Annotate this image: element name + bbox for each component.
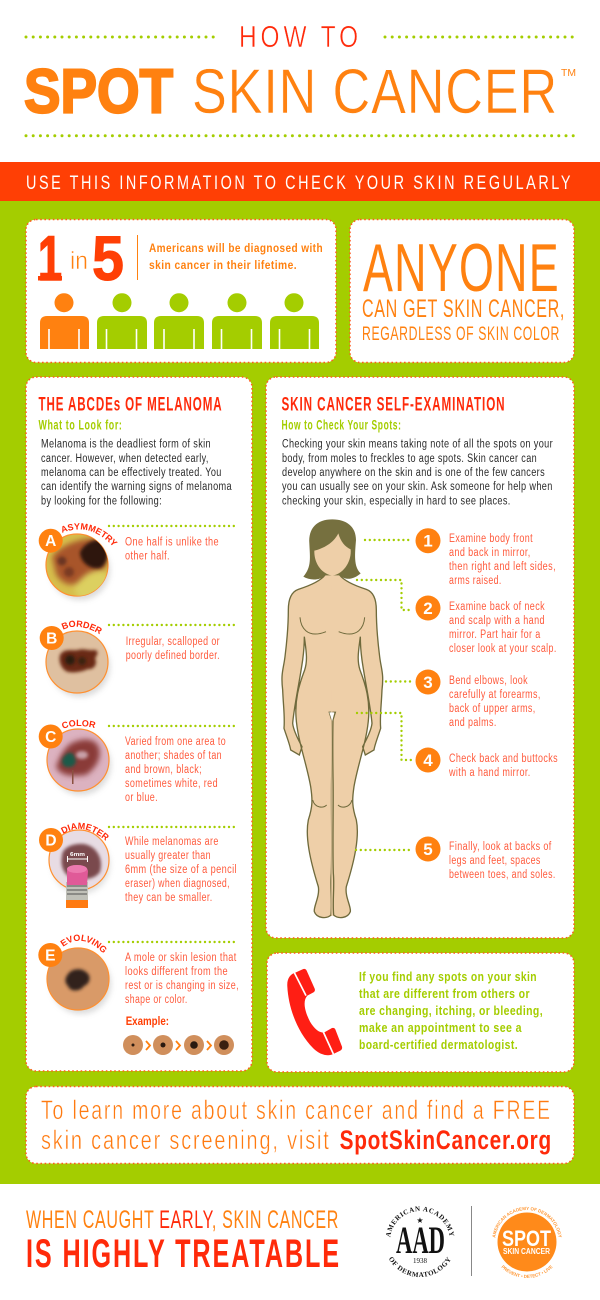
subheading: What to Look for:	[38, 416, 122, 432]
item C color: Varied from one area to	[125, 736, 226, 748]
step 3: carefully at forearms,	[449, 689, 541, 701]
item B border: Irregular, scalloped or	[126, 636, 220, 648]
item E evolving: A mole or skin lesion that	[125, 952, 237, 964]
item E evolving: rest or is changing in size,	[125, 980, 239, 992]
call to action text: that are different from others or	[359, 986, 530, 1001]
logo: AAD seal: AMERICAN ACADEMY	[386, 1206, 454, 1238]
title: HOW TO	[239, 19, 362, 54]
logo: SPOT seal: SPOT	[502, 1226, 551, 1251]
step 4: 4	[423, 751, 433, 770]
step 2	[416, 596, 557, 655]
logo: SPOT seal: AMERICAN ACADEMY OF DERMATOLOGY	[492, 1206, 562, 1238]
item B border	[40, 620, 235, 699]
panel: learn more banner: skin cancer screening, visit	[41, 1125, 331, 1155]
statistic description	[149, 241, 323, 272]
icon: pencil eraser	[66, 852, 88, 908]
footer slogan: IS HIGHLY TREATABLE	[26, 1232, 341, 1276]
panel: self-examination	[266, 377, 574, 938]
title: SPOT	[24, 58, 173, 126]
panel: learn more banner	[26, 1086, 574, 1164]
statistic description: skin cancer in their lifetime.	[149, 258, 297, 272]
call to action text: If you find any spots on your skin	[359, 969, 537, 984]
intro text	[41, 439, 232, 508]
panel: call to action	[267, 953, 574, 1072]
footer slogan	[26, 1206, 341, 1276]
logo: SPOT seal: PREVENT • DETECT • LIVE	[501, 1265, 553, 1278]
item A asymmetry: ASYMMETRY	[62, 523, 118, 546]
intro text	[282, 439, 553, 508]
step 1: arms raised.	[449, 575, 502, 587]
item A asymmetry: One half is unlike the	[125, 537, 219, 549]
item E evolving: shape or color.	[125, 994, 188, 1006]
illustration: body figure	[282, 519, 383, 918]
intro text: melanoma can be effectively treated. You	[41, 467, 222, 479]
step 3	[416, 670, 541, 729]
item A asymmetry: other half.	[125, 550, 170, 562]
item E evolving: looks different from the	[125, 966, 228, 978]
item D diameter: 6mm (the size of a pencil	[125, 864, 237, 876]
item B border: B	[46, 630, 57, 648]
step 5: legs and feet, spaces	[449, 855, 541, 867]
step 5: between toes, and soles.	[449, 869, 556, 881]
item D diameter: usually greater than	[125, 850, 211, 862]
logo: AAD seal: AAD	[396, 1219, 445, 1262]
connector lines	[356, 540, 413, 850]
call to action text: make an appointment to see a	[359, 1020, 522, 1035]
title	[24, 19, 576, 136]
green background	[0, 201, 600, 1184]
item E evolving: E	[45, 948, 55, 964]
statistic 1 in 5: 1	[38, 224, 62, 294]
icon: pencil eraser: 6mm	[70, 852, 86, 858]
logo: SPOT seal	[492, 1206, 562, 1278]
item B border: BORDER	[61, 620, 102, 634]
step 2: Examine back of neck	[449, 601, 545, 613]
icon: telephone handset	[287, 969, 342, 1055]
intro text: cancer. However, when detected early,	[41, 453, 209, 465]
step 5: 5	[423, 840, 433, 859]
intro text: Melanoma is the deadliest form of skin	[41, 439, 211, 451]
step 1: and back in mirror,	[449, 547, 531, 559]
item E evolving	[38, 934, 239, 1055]
item D diameter: DIAMETER	[60, 822, 109, 841]
intro text: can identify the warning signs of melanoma	[41, 481, 232, 493]
statistic 1 in 5: 5	[92, 224, 124, 294]
logo: AAD seal: 1938	[413, 1257, 428, 1265]
footer slogan: WHEN CAUGHT EARLY, SKIN CANCER	[26, 1206, 339, 1234]
call to action text: board-certified dermatologist.	[359, 1037, 518, 1052]
logo: SPOT seal: SKIN CANCER	[503, 1247, 550, 1256]
item D diameter: D	[45, 832, 57, 850]
call to action text	[359, 969, 543, 1052]
step 4	[416, 748, 558, 779]
item D diameter: eraser) when diagnosed,	[125, 878, 230, 890]
step 4: Check back and buttocks	[449, 753, 558, 765]
step 1: Examine body front	[449, 533, 533, 545]
item A asymmetry: A	[45, 533, 56, 550]
statistic 1 in 5	[38, 224, 138, 294]
intro text: body, from moles to freckles to age spots. Skin cancer can	[282, 453, 537, 465]
subheading: How to Check Your Spots:	[282, 416, 402, 432]
icon: five people	[40, 293, 319, 349]
example label: Example:	[126, 1014, 169, 1028]
item C color: C	[45, 729, 56, 746]
intro text: checking your skin, especially in hard to see places.	[282, 496, 511, 508]
statistic 1 in 5: in	[70, 247, 88, 275]
step 1: 1	[423, 532, 433, 551]
step 3: and palms.	[449, 717, 497, 729]
item C color: and brown, black;	[125, 764, 202, 776]
step 3: Bend elbows, look	[449, 675, 528, 687]
item D diameter	[39, 822, 237, 908]
heading: THE ABCDEs OF MELANOMA	[38, 394, 222, 416]
step 5: Finally, look at backs of	[449, 841, 552, 853]
item C color	[38, 720, 235, 804]
item E evolving: EVOLVING	[60, 934, 106, 952]
item D diameter: they can be smaller.	[125, 892, 213, 904]
step 3: back of upper arms,	[449, 703, 536, 715]
panel: ABCDEs of melanoma	[25, 376, 253, 1072]
intro text: by looking for the following:	[41, 496, 162, 508]
logo: AAD seal: OF DERMATOLOGY	[389, 1256, 450, 1278]
item A asymmetry	[38, 523, 235, 602]
step 2: and scalp with a hand	[449, 615, 545, 627]
item C color: another; shades of tan	[125, 750, 222, 762]
step 2: closer look at your scalp.	[449, 643, 557, 655]
step 2: 2	[423, 599, 433, 618]
step 2: mirror. Part hair for a	[449, 629, 541, 641]
logo: AAD seal: ★	[416, 1216, 424, 1225]
divider	[471, 1206, 472, 1276]
item B border: poorly defined border.	[126, 650, 220, 662]
red banner	[0, 162, 600, 201]
panel: anyone	[350, 220, 574, 362]
logo: AAD seal	[386, 1206, 454, 1278]
example mole progression	[123, 1035, 234, 1055]
title: TM	[561, 68, 576, 79]
step 3: 3	[423, 673, 433, 692]
item D diameter: While melanomas are	[125, 836, 219, 848]
step 4: with a hand mirror.	[448, 767, 531, 779]
statistic description: Americans will be diagnosed with	[149, 241, 323, 255]
item C color: or blue.	[125, 792, 158, 804]
step 1	[416, 528, 556, 587]
item C color: sometimes white, red	[125, 778, 218, 790]
step 5	[416, 836, 556, 881]
step 1: then right and left sides,	[449, 561, 556, 573]
call to action text: are changing, itching, or bleeding,	[359, 1003, 543, 1018]
panel: 1 in 5	[26, 220, 336, 362]
item C color: COLOR	[62, 720, 96, 728]
